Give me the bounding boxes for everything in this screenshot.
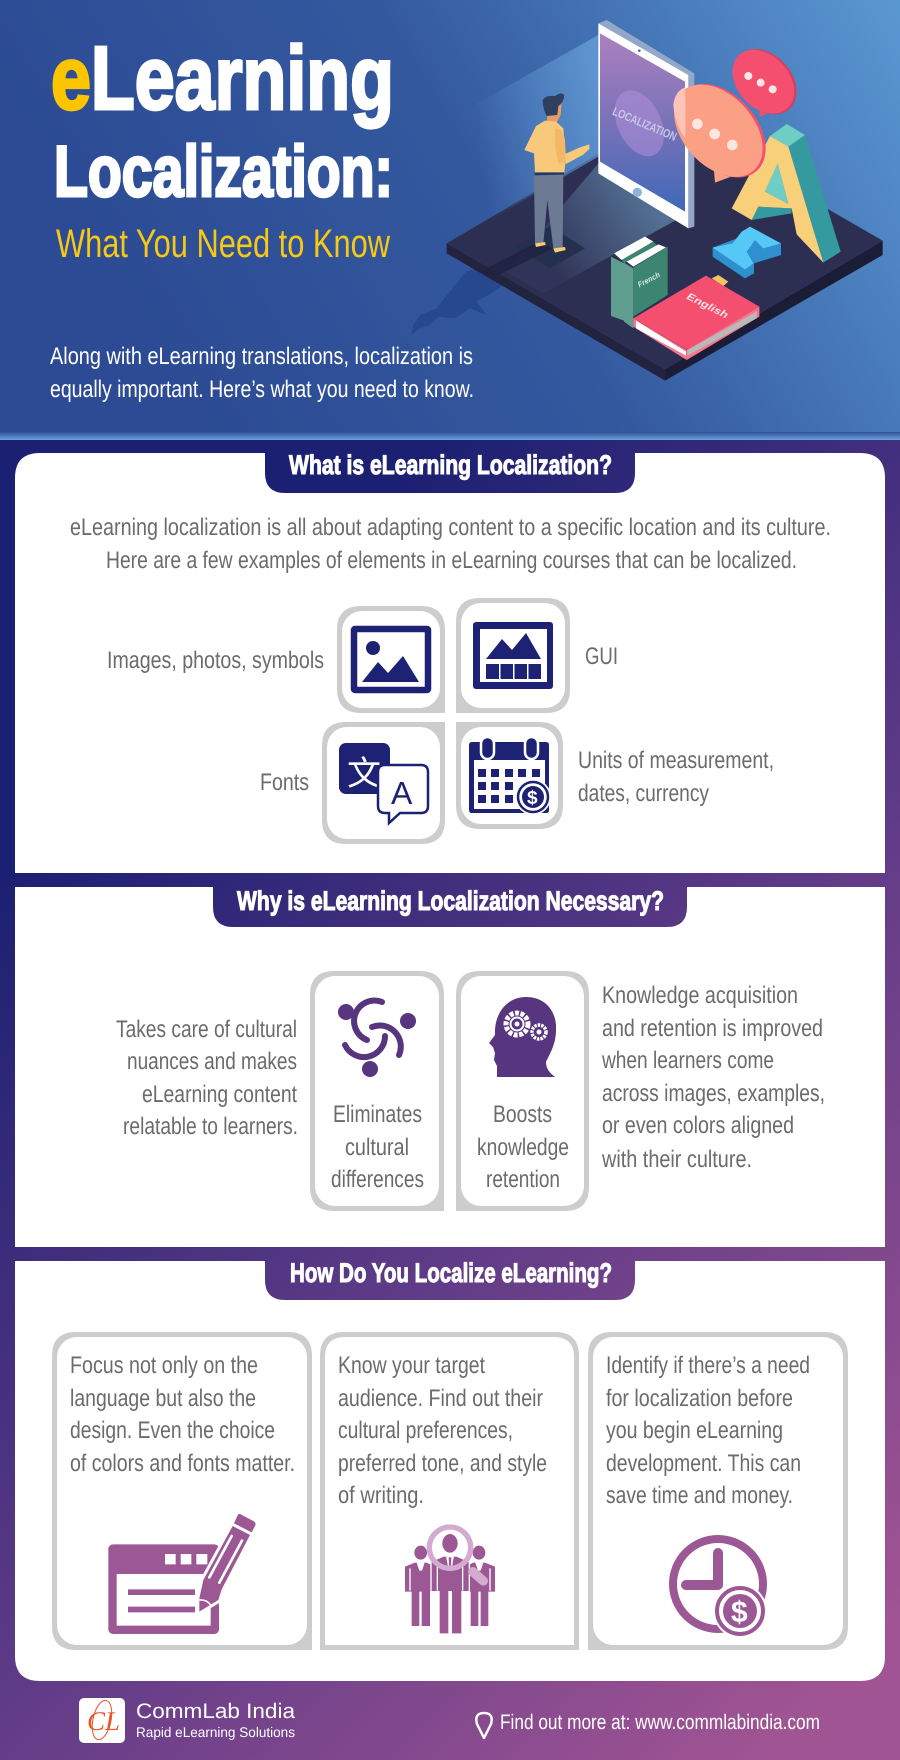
footer brand name: CommLab India [136, 1700, 295, 1723]
letter Z [713, 227, 781, 278]
icon: location pin [476, 1713, 492, 1738]
icon: calendar with currency: $ [527, 788, 538, 809]
label: units: dates, currency [578, 780, 709, 807]
card text: language but also the [70, 1385, 256, 1412]
letter A [732, 124, 841, 263]
knowledge acquisition text: when learners come [601, 1047, 774, 1074]
knowledge acquisition text [601, 982, 825, 1173]
icon: translate: 文 [347, 755, 381, 793]
icon: head with gears [489, 997, 556, 1077]
card text [606, 1352, 810, 1509]
platform [447, 115, 883, 381]
panel: why is eLearning localization necessary [15, 886, 885, 1247]
title [51, 29, 394, 212]
card text: development. This can [606, 1450, 801, 1477]
card text: Identify if there’s a need [606, 1352, 810, 1379]
large speech bubble [656, 66, 784, 195]
heading tab: How Do You Localize eLearning? [290, 1258, 612, 1288]
label: boosts: knowledge [477, 1134, 569, 1161]
header banner [0, 0, 900, 440]
card: boosts knowledge retention [456, 971, 589, 1211]
footer brand name [136, 1700, 295, 1740]
icon: clock and coin [673, 1539, 767, 1638]
icon: image [337, 606, 445, 713]
knowledge acquisition text: with their culture. [601, 1146, 752, 1173]
card text: audience. Find out their [338, 1385, 543, 1412]
card text: for localization before [606, 1385, 793, 1412]
floor shadow [480, 242, 553, 275]
footer link: Find out more at: www.commlabindia.com [500, 1711, 820, 1734]
green book French [611, 237, 668, 328]
page background [0, 430, 900, 1760]
intro text [50, 343, 474, 403]
card text: preferred tone, and style [338, 1450, 547, 1477]
label: fonts: Fonts [260, 769, 309, 796]
panel: what is eLearning localization [15, 450, 885, 873]
label: boosts: Boosts [493, 1101, 552, 1128]
label: eliminates: differences [331, 1166, 424, 1193]
card text: of colors and fonts matter. [70, 1450, 295, 1477]
knowledge acquisition text: and retention is improved [602, 1015, 823, 1042]
red book English: English [685, 291, 730, 321]
heading tab [265, 1258, 635, 1300]
card: know your audience [320, 1332, 579, 1650]
card text: cultural preferences, [338, 1417, 513, 1444]
heading tab: What is eLearning Localization? [289, 450, 612, 480]
tablet [598, 20, 694, 228]
red book English [633, 275, 759, 360]
card text: Know your target [338, 1352, 485, 1379]
card text [338, 1352, 547, 1509]
person [524, 94, 589, 253]
heading tab [265, 450, 635, 493]
label: GUI: GUI [585, 643, 618, 670]
knowledge acquisition text: or even colors aligned [602, 1112, 794, 1139]
person shadow on background [412, 257, 540, 334]
illustration: isometric localization scene [412, 20, 883, 381]
label: boosts: retention [486, 1166, 560, 1193]
icon: people under magnifier [405, 1527, 495, 1634]
knowledge acquisition text: Knowledge acquisition [602, 982, 798, 1009]
card text: you begin eLearning [606, 1417, 783, 1444]
subtitle: What You Need to Know [56, 222, 390, 266]
footer brand name: Rapid eLearning Solutions [136, 1724, 295, 1740]
footer logo [79, 1698, 125, 1743]
floor mat [515, 226, 585, 268]
cultural nuances text [116, 1016, 298, 1140]
light beam [430, 35, 688, 293]
card: eliminates cultural differences [310, 971, 444, 1211]
card text: Focus not only on the [70, 1352, 258, 1379]
small speech bubble [720, 37, 809, 127]
card text [70, 1352, 295, 1477]
cultural nuances text: relatable to learners. [123, 1113, 298, 1140]
icon: browser window and pencil [108, 1514, 256, 1634]
knowledge acquisition text: across images, examples, [602, 1080, 825, 1107]
label: eliminates [331, 1101, 424, 1193]
label: units [578, 747, 774, 807]
cultural nuances text: nuances and makes [127, 1048, 297, 1075]
panel: how do you localize eLearning [15, 1258, 885, 1681]
label: images: Images, photos, symbols [107, 647, 324, 674]
cultural nuances text: eLearning content [142, 1081, 297, 1108]
icon: calendar with currency [456, 722, 563, 829]
cultural nuances text: Takes care of cultural [116, 1016, 297, 1043]
card text: design. Even the choice [70, 1417, 275, 1444]
card text: save time and money. [606, 1482, 793, 1509]
card: language and design [52, 1332, 312, 1650]
tablet: LOCALIZATION [611, 104, 679, 143]
icon: translate [322, 722, 445, 844]
label: eliminates: cultural [345, 1134, 409, 1161]
card text: of writing. [338, 1482, 424, 1509]
label: eliminates: Eliminates [333, 1101, 422, 1128]
label: boosts [477, 1101, 569, 1193]
icon: clock and coin: $ [731, 1596, 748, 1629]
icon: three linked figures [338, 1001, 416, 1077]
footer logo: CL [87, 1706, 120, 1736]
heading tab [213, 886, 687, 927]
title: Localization: [54, 132, 393, 212]
green book French: French [636, 270, 661, 289]
icon: GUI [456, 598, 570, 713]
intro text: Along with eLearning translations, localization is [50, 343, 473, 370]
definition text [70, 514, 831, 574]
card: identify need [588, 1332, 848, 1650]
intro text: equally important. Here’s what you need to know. [50, 376, 474, 403]
label: units: Units of measurement, [578, 747, 774, 774]
heading tab: Why is eLearning Localization Necessary? [237, 886, 664, 916]
icon: translate: A [391, 775, 413, 811]
title: eLearning [51, 29, 394, 129]
